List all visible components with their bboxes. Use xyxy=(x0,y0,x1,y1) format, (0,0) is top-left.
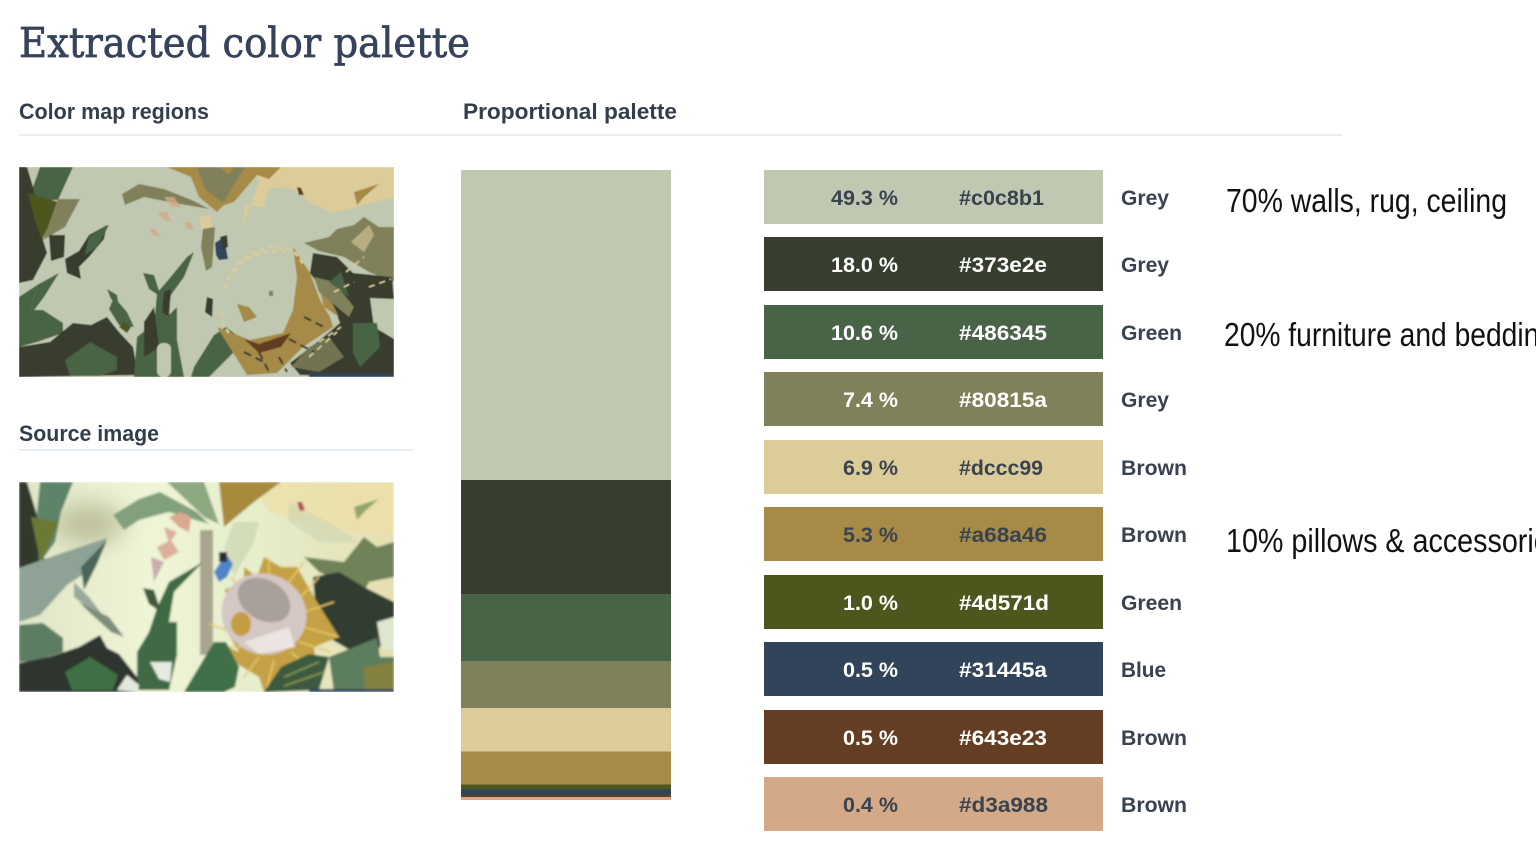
swatch row: 7.4% grey xyxy=(764,372,1169,426)
swatch row: 10.6% green: Green xyxy=(1121,322,1182,345)
swatch row: 1.0% green: 1.0 % xyxy=(843,592,898,615)
swatch row: 0.5% blue: 0.5 % xyxy=(843,659,898,682)
swatch row: 49.3% grey: 49.3 % xyxy=(831,187,898,210)
flower spikes xyxy=(217,247,333,375)
swatch row: 6.9% brown: Brown xyxy=(1121,457,1187,480)
swatch row: 7.4% grey: #80815a xyxy=(959,389,1047,412)
swatch row: 10.6% green: #486345 xyxy=(959,322,1047,345)
swatch row: 6.9% brown: #dccc99 xyxy=(959,457,1043,480)
swatch row: 10.6% green xyxy=(764,305,1182,359)
swatch row: 5.3% brown: #a68a46 xyxy=(959,524,1047,547)
swatch row: 0.5% brown xyxy=(764,710,1187,764)
swatch row: 49.3% grey: Grey xyxy=(1121,187,1169,210)
swatch row: 0.5% brown: #643e23 xyxy=(959,727,1047,750)
heading: source image: Source image xyxy=(19,421,159,446)
heading: color map regions: Color map regions xyxy=(19,99,209,124)
swatch row: 0.5% blue: Blue xyxy=(1121,659,1166,682)
swatch row: 0.4% brown xyxy=(764,777,1187,831)
swatch row: 10.6% green: 10.6 % xyxy=(831,322,898,345)
swatch row: 5.3% brown xyxy=(764,507,1187,561)
swatch row: 6.9% brown: 6.9 % xyxy=(843,457,898,480)
swatch row: 0.5% blue xyxy=(764,642,1166,696)
swatch row: 18.0% grey: #373e2e xyxy=(959,254,1047,277)
swatch row: 7.4% grey: 7.4 % xyxy=(843,389,898,412)
swatch row: 0.5% brown: Brown xyxy=(1121,727,1187,750)
swatch row: 0.4% brown: Brown xyxy=(1121,794,1187,817)
swatch row: 18.0% grey: Grey xyxy=(1121,254,1169,277)
swatch row: 1.0% green xyxy=(764,575,1182,629)
swatch row: 0.5% brown: 0.5 % xyxy=(843,727,898,750)
heading: proportional palette: Proportional palette xyxy=(463,99,677,124)
swatch row: 7.4% grey: Grey xyxy=(1121,389,1169,412)
panel: color map image xyxy=(19,167,394,377)
swatch row: 18.0% grey: 18.0 % xyxy=(831,254,898,277)
title: Extracted color palette xyxy=(19,19,470,67)
swatch row: 6.9% brown xyxy=(764,440,1187,494)
swatch row: 5.3% brown: 5.3 % xyxy=(843,524,898,547)
swatch row: 1.0% green: #4d571d xyxy=(959,592,1049,615)
flower spikes xyxy=(217,557,339,692)
swatch row: 5.3% brown: Brown xyxy=(1121,524,1187,547)
swatch row: 0.4% brown: 0.4 % xyxy=(843,794,898,817)
swatch row: 49.3% grey xyxy=(764,170,1169,224)
swatch row: 18.0% grey xyxy=(764,237,1169,291)
panel: source image xyxy=(19,482,394,692)
swatch row: 49.3% grey: #c0c8b1 xyxy=(959,187,1044,210)
swatch row: 0.5% blue: #31445a xyxy=(959,659,1047,682)
swatch row: 1.0% green: Green xyxy=(1121,592,1182,615)
proportional palette bar xyxy=(461,170,671,800)
swatch row: 0.4% brown: #d3a988 xyxy=(959,794,1048,817)
